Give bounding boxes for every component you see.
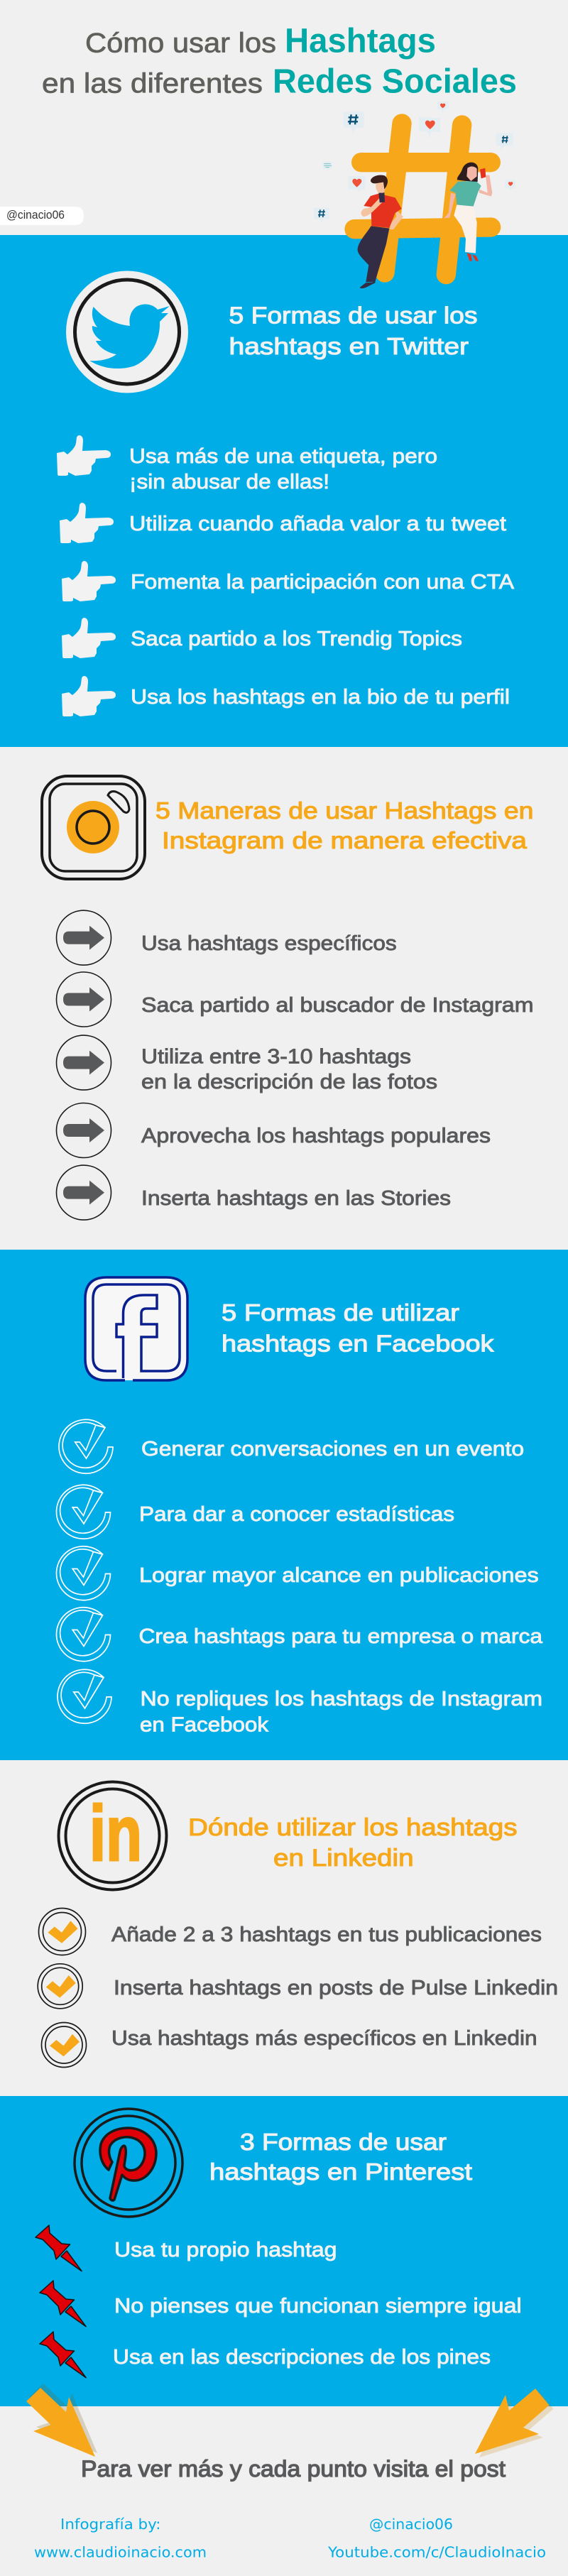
facebook item 2: Para dar a conocer estadísticas [139,1503,454,1526]
facebook item 4 [57,1608,543,1661]
credits left: www.claudioinacio.com [34,2543,207,2560]
title line 1: Hashtags [285,23,436,60]
handle pill [0,207,84,225]
icon: pinterest [75,2109,182,2217]
heading: linkedin: en Linkedin [273,1845,414,1872]
twitter item 3: Fomenta la participación con una CTA [131,571,515,594]
instagram item 3 [57,1035,437,1093]
instagram item 4 [57,1103,491,1157]
facebook item 5: en Facebook [140,1714,269,1737]
facebook item 3: Lograr mayor alcance en publicaciones [139,1564,539,1587]
pinterest item 1 [36,2225,337,2271]
instagram item 2: Saca partido al buscador de Instagram [141,994,534,1017]
pinterest item 3: Usa en las descripciones de los pines [113,2346,491,2369]
icon: linkedin: in [89,1790,142,1877]
twitter item 5: Usa los hashtags en la bio de tu perfil [131,686,510,709]
twitter item 4: Saca partido a los Trendig Topics [131,628,462,650]
linkedin item 2: Inserta hashtags en posts de Pulse Linkedin [114,1977,558,1999]
pinterest item 2: No pienses que funcionan siempre igual [114,2295,522,2318]
linkedin item 2 [38,1964,558,2009]
pinterest item 1: Usa tu propio hashtag [114,2239,337,2261]
facebook item 3 [57,1546,539,1600]
title line 2: Redes Sociales [273,62,517,101]
panel: footer [0,2406,568,2576]
panel: facebook [0,1250,568,1760]
facebook item 5 [58,1669,542,1737]
credits left [34,2516,207,2560]
credits right: @cinacio06 [369,2516,453,2533]
heading: twitter: 5 Formas de usar los [229,302,477,328]
icon: instagram [42,776,145,879]
title line 2 [42,62,517,101]
man [358,175,403,288]
instagram item 5: Inserta hashtags en las Stories [141,1187,451,1210]
linkedin item 3: Usa hashtags más específicos en Linkedin [111,2027,537,2050]
panel: pinterest [0,2096,568,2406]
heading: facebook: 5 Formas de utilizar [222,1299,459,1326]
illustration: hashtag with two people [314,102,515,288]
heading: twitter: hashtags en Twitter [229,333,469,359]
heading: twitter [229,302,477,359]
heading: instagram [155,797,534,853]
heading: pinterest: 3 Formas de usar [240,2129,447,2155]
title line 1: Cómo usar los [85,28,276,58]
arrow: right [475,2389,554,2457]
linkedin item 3 [41,2022,537,2068]
instagram item 1: Usa hashtags específicos [141,932,397,955]
heading: instagram: 5 Maneras de usar Hashtags en [155,797,534,824]
call to action: Para ver más y cada punto visita el post [81,2456,506,2482]
pinterest item 2 [40,2281,522,2327]
twitter item 2 [60,503,506,543]
twitter item 3 [62,561,515,601]
instagram item 3: Utiliza entre 3-10 hashtags [141,1045,411,1068]
hashtag symbol [354,124,491,275]
facebook item 1 [59,1419,524,1473]
instagram item 5 [57,1165,451,1220]
twitter item 1 [57,435,437,493]
handle pill: @cinacio06 [6,209,65,222]
woman [444,163,492,261]
arrow: left [26,2384,97,2457]
title line 1 [85,23,436,60]
speech bubbles [314,102,515,223]
credits left: Infografía by: [60,2516,160,2533]
title line 2: en las diferentes [42,68,263,99]
linkedin item 1 [38,1909,542,1955]
panel: instagram [0,747,568,1250]
twitter item 5 [62,676,510,716]
instagram item 1 [57,910,397,965]
heading: facebook [222,1299,494,1356]
linkedin item 1: Añade 2 a 3 hashtags en tus publicaciones [111,1923,542,1946]
twitter item 2: Utiliza cuando añada valor a tu tweet [129,513,506,535]
icon: twitter bird [66,271,188,393]
heading: pinterest: hashtags en Pinterest [209,2159,472,2185]
pinterest item 3 [40,2332,491,2378]
heading: linkedin [188,1814,517,1872]
facebook item 4: Crea hashtags para tu empresa o marca [139,1625,543,1648]
panel: linkedin [0,1760,568,2096]
panel: header [0,0,568,235]
credits right: Youtube.com/c/ClaudioInacio [327,2543,546,2560]
instagram item 2 [57,972,534,1027]
heading: facebook: hashtags en Facebook [222,1331,494,1356]
icon: linkedin [58,1782,166,1890]
twitter item 1: ¡sin abusar de ellas! [129,471,329,493]
heading: linkedin: Dónde utilizar los hashtags [188,1814,517,1841]
instagram item 4: Aprovecha los hashtags populares [141,1125,491,1147]
facebook item 1: Generar conversaciones en un evento [141,1438,524,1461]
icon: facebook [85,1277,187,1380]
twitter item 4 [62,618,462,658]
facebook item 5: No repliques los hashtags de Instagram [141,1688,542,1710]
heading: pinterest [209,2129,472,2185]
instagram item 3: en la descripción de las fotos [141,1071,437,1093]
facebook item 2 [57,1485,454,1539]
heading: instagram: Instagram de manera efectiva [162,827,528,853]
panel: twitter [0,235,568,747]
twitter item 1: Usa más de una etiqueta, pero [129,445,437,468]
credits right [327,2516,546,2560]
